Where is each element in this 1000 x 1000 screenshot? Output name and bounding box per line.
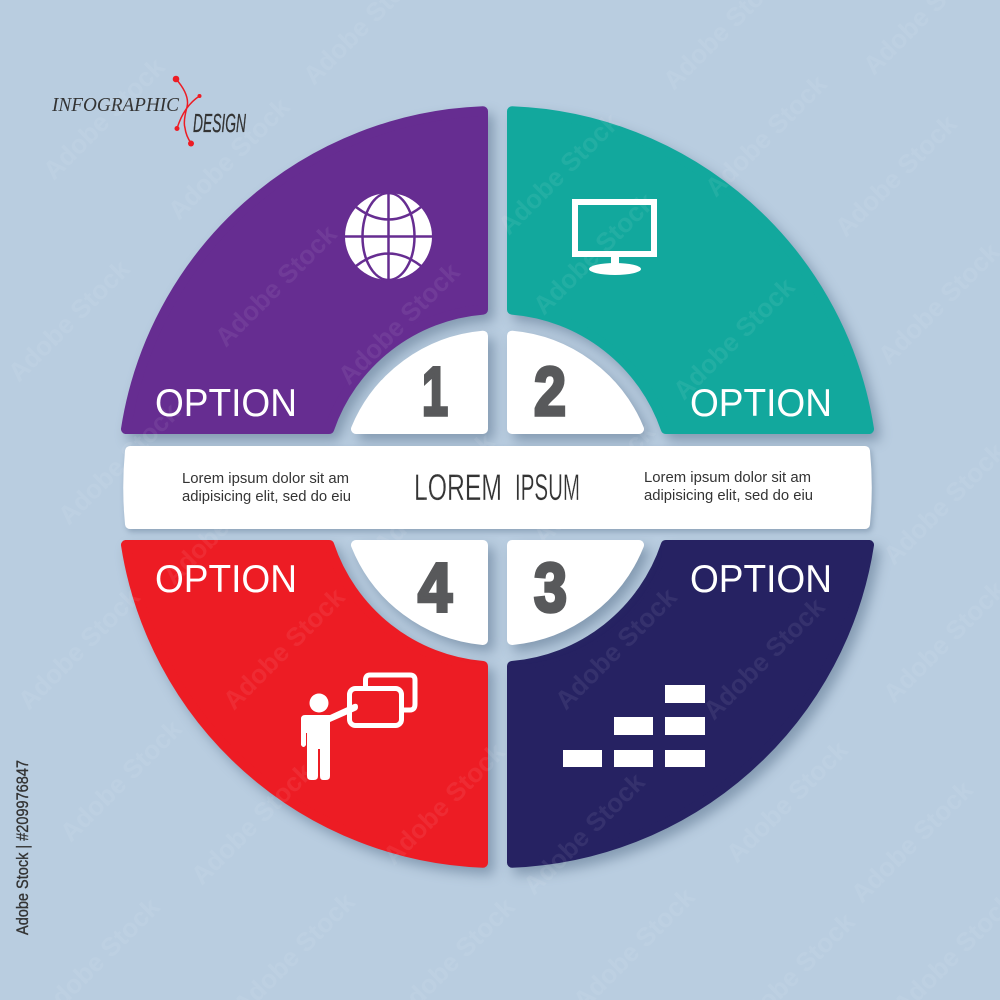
watermark pattern: Adobe Stock bbox=[209, 218, 343, 352]
title: LOREM IPSUM: LOREM bbox=[414, 467, 502, 508]
watermark pattern: Adobe Stock bbox=[2, 253, 136, 387]
panel: white segment 3 bbox=[512, 545, 639, 640]
panel: central white band bbox=[128, 451, 867, 524]
watermark pattern: Adobe Stock bbox=[720, 734, 854, 868]
watermark pattern: Adobe Stock bbox=[332, 256, 466, 390]
watermark pattern: Adobe Stock bbox=[12, 581, 146, 715]
watermark pattern: Adobe Stock bbox=[527, 416, 661, 550]
watermark pattern: Adobe Stock bbox=[157, 456, 291, 590]
text block: right band copy: adipisicing elit, sed do eiu bbox=[644, 488, 813, 504]
panel: top-left purple quadrant bbox=[126, 111, 483, 429]
text block: right band copy bbox=[644, 470, 813, 504]
text block: right band copy: Lorem ipsum dolor sit am bbox=[644, 470, 811, 486]
watermark pattern: Adobe Stock bbox=[54, 713, 188, 847]
heading: OPTION bottom left: OPTION bbox=[155, 558, 297, 601]
panel: top-right teal quadrant bbox=[512, 111, 869, 429]
heading: OPTION bottom right: OPTION bbox=[690, 558, 832, 601]
watermark pattern: Adobe Stock bbox=[527, 186, 661, 320]
icon: monitor bbox=[572, 199, 657, 275]
watermark pattern: Adobe Stock bbox=[162, 91, 296, 225]
panel: bottom-right navy quadrant bbox=[512, 545, 869, 863]
number 2: 2 bbox=[534, 353, 566, 430]
watermark pattern: Adobe Stock bbox=[699, 68, 833, 202]
text block: left band copy: adipisicing elit, sed do eiu bbox=[182, 489, 351, 505]
watermark pattern: Adobe Stock bbox=[517, 766, 651, 900]
logo: Infographic Design: DESIGN bbox=[193, 108, 246, 138]
watermark pattern: Adobe Stock bbox=[37, 51, 171, 185]
watermark pattern: Adobe Stock bbox=[367, 426, 501, 560]
watermark pattern: Adobe Stock bbox=[185, 756, 319, 890]
text block: left band copy bbox=[182, 471, 351, 505]
watermark pattern: Adobe Stock bbox=[667, 271, 801, 405]
heading: OPTION top left: OPTION bbox=[155, 382, 297, 425]
heading: OPTION top right: OPTION bbox=[690, 382, 832, 425]
number 1: 1 bbox=[422, 353, 448, 430]
watermark pattern: Adobe Stock bbox=[217, 581, 351, 715]
text block: left band copy: Lorem ipsum dolor sit am bbox=[182, 471, 349, 487]
icon: stepped bars bbox=[563, 685, 705, 767]
watermark pattern: Adobe Stock bbox=[697, 591, 831, 725]
watermark pattern: Adobe Stock bbox=[845, 774, 979, 908]
logo: Infographic Design bbox=[51, 76, 246, 146]
watermark pattern: Adobe Stock bbox=[377, 736, 511, 870]
logo: Infographic Design: INFOGRAPHIC bbox=[51, 94, 180, 116]
watermark pattern: Adobe Stock bbox=[549, 581, 683, 715]
panel: white segment 4 bbox=[356, 545, 483, 640]
side text: stock id: Adobe Stock | #209976847 bbox=[13, 760, 32, 935]
panel: white segment 1 bbox=[356, 336, 483, 429]
icon: presenter with boards bbox=[301, 675, 415, 780]
number 3: 3 bbox=[534, 549, 567, 626]
watermark pattern: Adobe Stock bbox=[492, 106, 626, 240]
panel: bottom-left red quadrant bbox=[126, 545, 483, 863]
number 4: 4 bbox=[418, 549, 452, 626]
panel: white segment 2 bbox=[512, 336, 639, 429]
watermark pattern: Adobe Stock bbox=[52, 396, 186, 530]
icon: globe bbox=[345, 193, 432, 280]
title: LOREM IPSUM: IPSUM bbox=[515, 467, 580, 508]
watermark pattern: Adobe Stock bbox=[829, 108, 963, 242]
